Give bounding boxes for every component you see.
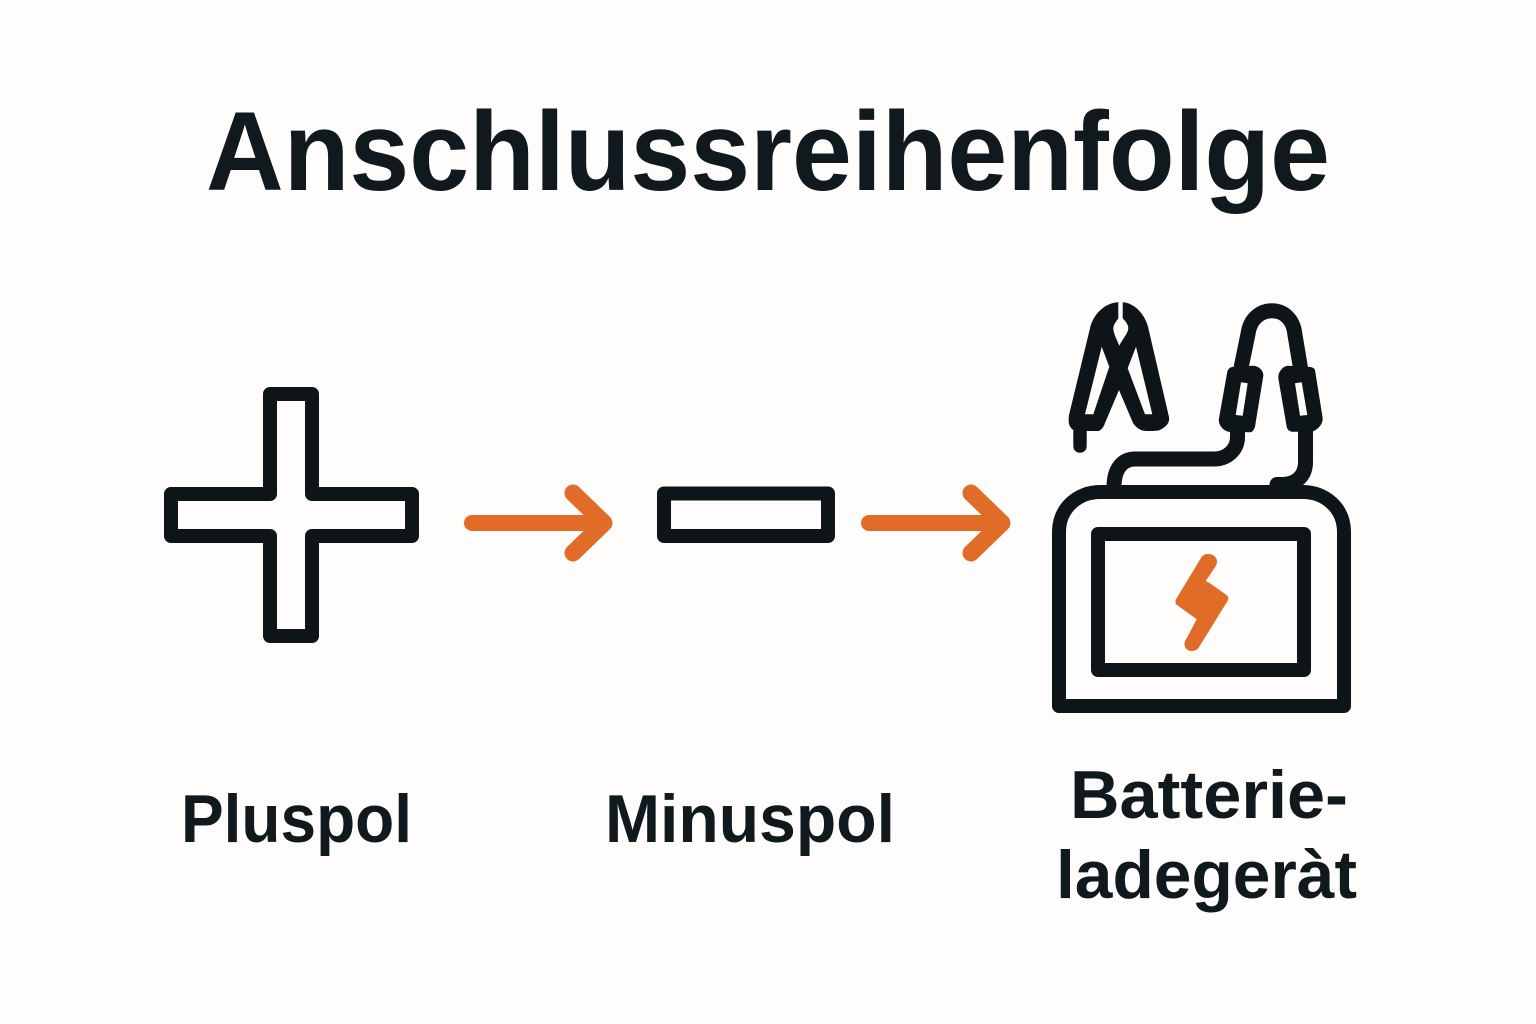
right clamp jaw xyxy=(1241,311,1300,368)
icon: plus pole xyxy=(171,394,412,636)
cable to charger right xyxy=(1277,430,1306,484)
arrow: minus to charger xyxy=(869,493,1002,553)
cable to charger left xyxy=(1114,430,1238,487)
charger body xyxy=(1059,492,1344,706)
arrow: plus to minus xyxy=(472,493,604,553)
icon: battery charger xyxy=(1059,302,1344,706)
label: Batterie-: Batterie- xyxy=(1070,757,1348,833)
icon: minus pole xyxy=(664,494,828,536)
charger display xyxy=(1098,534,1304,670)
label: ladegerät: ladegeràt xyxy=(1056,837,1357,913)
label: Minuspol: Minuspol xyxy=(605,781,895,857)
icon: left clamp xyxy=(1069,302,1169,453)
label: Pluspol: Pluspol xyxy=(181,781,412,857)
icon: right clamp with cables xyxy=(1114,311,1323,487)
left sleeve xyxy=(1219,366,1263,432)
icon: lightning bolt xyxy=(1175,554,1228,651)
title: Anschlussreihenfolge xyxy=(206,89,1330,214)
right sleeve xyxy=(1278,366,1323,432)
